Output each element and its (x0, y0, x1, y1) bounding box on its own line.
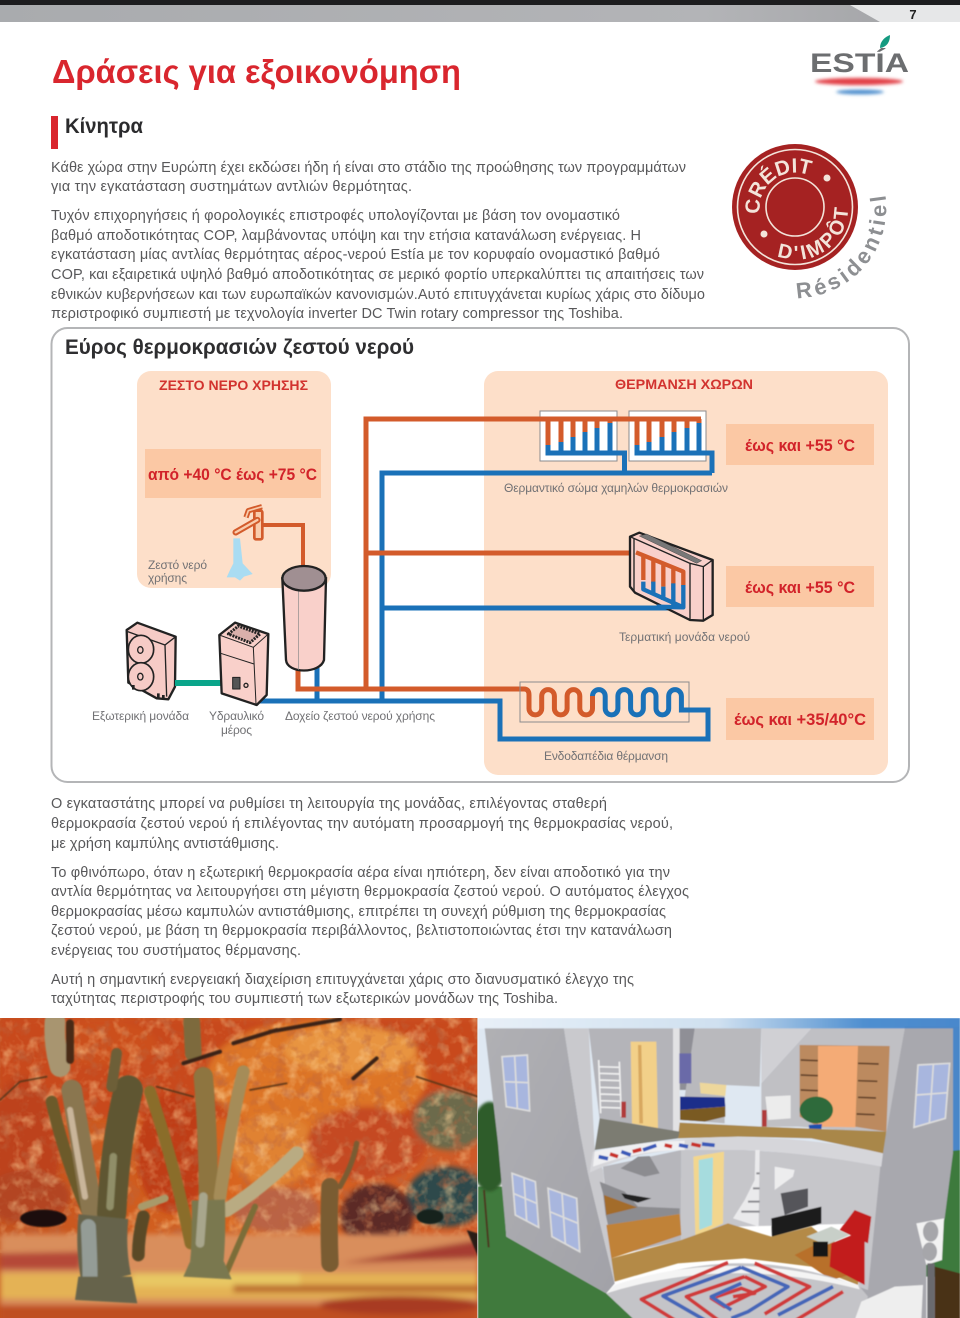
page number: 7 (909, 7, 917, 22)
intro text block: εγκατάσταση μίας αντλίας θερμότητας αέρος-νερού Estía με τον κορυφαίο ονομαστικό βαθμό (51, 247, 660, 263)
lower text block: αντλία θερμότητας να λειτουργήσει στη μέγιστη θερμοκρασία ζεστού νερού. Ο αυτόματος έλεγχος (51, 884, 689, 900)
heading: Κίνητρα (51, 115, 143, 149)
tree (478, 1100, 502, 1192)
photo: autumn trees (0, 1018, 487, 1318)
tree 3 (303, 1187, 356, 1263)
logo: Estia: ESTÍA (810, 48, 909, 78)
panel heading: Εύρος θερμοκρασιών ζεστού νερού (65, 335, 414, 359)
lower text block: θερμοκρασία ζεστού νερού ή επιλέγοντας την αυτόματη προσαρμογή της θερμοκρασίας νερού, (51, 816, 673, 832)
tree 1 (55, 1022, 60, 1067)
temperature badge: hot water (145, 449, 321, 498)
temperature badge: radiators (726, 424, 874, 465)
icon: tap and running water (227, 507, 262, 581)
intro text block: Κάθε χώρα στην Ευρώπη έχει εκδώσει ήδη ή είναι στο στάδιο της προώθησης των προγραμμάτων (51, 160, 686, 176)
intro text block: εθνικών κυβερνήσεων και των ευρωπαϊκών κανονισμών.Αυτό επιτυγχάνεται κυρίως χάρις στο δίδυμο (51, 287, 705, 303)
zone: domestic hot water (137, 371, 331, 588)
plant (800, 1097, 833, 1123)
slab (590, 1137, 883, 1173)
diagram labels: μέρος (221, 723, 252, 737)
lower text block: ζεστού νερού, με βάση τη θερμοκρασία περιβάλλοντος, βελτιστοποιώντας έτσι την κατανάλωση (51, 923, 672, 939)
bed (679, 1053, 691, 1083)
lower text block: Ο εγκαταστάτης μπορεί να ρυθμίσει τη λειτουργία της μονάδας, επιλέγοντας σταθερή (51, 796, 607, 812)
stamp: crédit d'impôt résidentiel: Résidentiel (796, 196, 886, 298)
dark branches (183, 1019, 377, 1078)
intro text block: περιστροφικό συμπιεστή με τεχνολογία inverter DC Twin rotary compressor της Toshiba. (51, 306, 623, 322)
lower text block (51, 796, 689, 1007)
windows (502, 1055, 950, 1252)
trunk bases (75, 1277, 137, 1303)
sky and ground (478, 1028, 844, 1170)
icon: hydraulic unit (219, 623, 268, 705)
door (693, 1152, 724, 1237)
temperature badge: fan coil: έως και +55 °C (745, 579, 855, 597)
heading: domestic hot water: ΖΕΣΤΟ ΝΕΡΟ ΧΡΗΣΗΣ (159, 377, 308, 393)
lower floor (611, 1223, 860, 1285)
upper floor (678, 1123, 886, 1153)
stamp: crédit d'impôt résidentiel: CRÉDIT (745, 158, 813, 213)
diagram labels (92, 481, 750, 763)
intro text block (51, 160, 705, 322)
temperature badge: radiators: έως και +55 °C (745, 437, 855, 455)
glass table and sofa (806, 1227, 850, 1245)
lower text block: Αυτή η σημαντική ενεργειακή διαχείριση επιτυγχάνεται χάρις στο διανυσματικό έλεγχο της (51, 972, 634, 988)
lower text block: Το φθινόπωρο, όταν η εξωτερική θερμοκρασία αέρα είναι ηπιότερη, δεν είναι αποδοτικό για την (51, 865, 670, 881)
lower text block: ταχύτητας περιστροφής του συμπιεστή των εξωτερικών μονάδων της Toshiba. (51, 991, 558, 1007)
wardrobe (800, 1045, 890, 1132)
diagram labels: χρήσης (148, 571, 187, 585)
floor heating coil (520, 682, 690, 722)
left wall (485, 1028, 615, 1293)
stamp: crédit d'impôt résidentiel: D'IMPÔT (778, 207, 848, 260)
lower walls (603, 1150, 681, 1257)
intro text block: Τυχόν επιχορηγήσεις ή φορολογικές επιστροφές υπολογίζονται με βάση τον ονομαστικό (51, 208, 620, 224)
diagram labels: Δοχείο ζεστού νερού χρήσης (285, 709, 435, 723)
connector: refrigerant line (175, 680, 222, 686)
panel: temperature ranges (52, 328, 909, 782)
bathroom door (631, 1042, 658, 1128)
intro text block: COP, και εξαιρετικά υψηλό βαθμό αποδοτικότητας σε μερικό φορτίο υπερκαλύπτει τις απαιτήσεις των (51, 267, 704, 283)
lower text block: θερμοκρασίας μέσω καμπυλών αντιστάθμισης, επιτρέπει τη συνεχή ρύθμιση της θερμοκρασίας (51, 904, 666, 920)
tree 2 (150, 1092, 191, 1243)
TV (781, 1188, 808, 1215)
intro text block: για την εγκατάσταση συστημάτων αντλιών θερμότητας. (51, 179, 412, 195)
temperature badge: floor heating: έως και +35/40°C (734, 711, 866, 729)
diagram labels: Υδραυλικό (209, 709, 264, 723)
icon: fan coil unit (630, 533, 713, 621)
heading: space heating: ΘΕΡΜΑΝΣΗ ΧΩΡΩΝ (615, 376, 753, 392)
diagram labels: Ενδοδαπέδια θέρμανση (544, 749, 668, 763)
lower text block: με χρήση καμπύλης αντιστάθμισης. (51, 836, 279, 852)
page header band (0, 0, 960, 22)
photo: house cutaway with floor heating (469, 1018, 960, 1318)
towel radiator (599, 1060, 621, 1117)
heading: Κίνητρα: Κίνητρα (65, 115, 143, 138)
ground (0, 1234, 480, 1318)
diagram labels: Τερματική μονάδα νερού (619, 630, 750, 644)
title: Δράσεις για εξοικονόμηση (52, 53, 461, 90)
lower text block: ενέργειας του συστήματος θέρμανσης. (51, 943, 301, 959)
floor heating (608, 1262, 868, 1298)
slab pipes (599, 1144, 715, 1159)
temperature badge: floor heating (726, 698, 874, 740)
stamp: crédit d'impôt résidentiel (732, 144, 886, 298)
outdoor unit on wall (916, 1218, 944, 1265)
intro text block: βαθμό αποδοτικότητας COP, λαμβάνοντας υπόψη και την ετήσια κατανάλωση ενέργειας. Η (51, 228, 641, 244)
bottom slab under house (606, 1267, 891, 1318)
cooker hood (621, 1156, 660, 1177)
zone: space heating (484, 371, 888, 775)
radiators (540, 411, 712, 473)
diagram labels: Εξωτερική μονάδα (92, 709, 189, 723)
icon: outdoor unit (127, 623, 176, 700)
stairs (733, 1150, 760, 1227)
temperature badge: fan coil (726, 566, 874, 607)
panel frame (52, 328, 909, 782)
diagram labels: Θερμαντικό σώμα χαμηλών θερμοκρασιών (504, 481, 728, 495)
logo: Estia (810, 35, 909, 94)
temperature badge: hot water: από +40 °C έως +75 °C (148, 466, 317, 484)
inner cut faces (564, 1028, 615, 1283)
diagram labels: Ζεστό νερό (148, 558, 207, 572)
kitchen (600, 1182, 680, 1225)
icon: hot water tank (282, 566, 326, 670)
upper floor walls (589, 1028, 678, 1132)
pipes: main circuit (257, 419, 712, 739)
